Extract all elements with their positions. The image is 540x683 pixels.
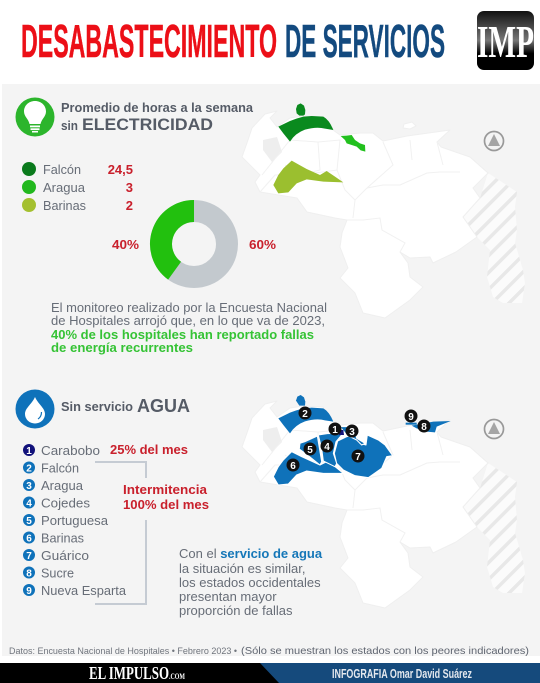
list: states with water failures: Sucre <box>41 566 74 580</box>
source note: (Sólo se muestran los estados con los peores indicadores) <box>241 645 529 657</box>
legend: electricity hours: 2 <box>126 198 133 213</box>
list: states with water failures: Falcón <box>41 460 79 476</box>
map number markers: 2 <box>302 409 308 420</box>
callout: intermitencia: Intermitencia <box>123 482 208 497</box>
map number markers: 7 <box>355 452 361 463</box>
text block: water summary: los estados occidentales <box>179 575 321 590</box>
heading: electricidad <box>61 101 254 134</box>
legend: electricity hours: Barinas <box>43 198 86 213</box>
map number markers: 1 <box>332 425 338 436</box>
heading: electricidad: sin <box>61 119 78 133</box>
source note: Datos: Encuesta Nacional de Hospitales • Febrero 2023 • <box>9 646 237 657</box>
icon: north marker <box>484 420 504 438</box>
map: electricity states <box>242 103 525 318</box>
map number markers: 6 <box>290 461 296 472</box>
list: states with water failures: 1 <box>26 446 32 457</box>
callout: 25% del mes: 25% del mes <box>110 442 188 457</box>
legend: electricity hours: 24,5 <box>108 162 133 177</box>
legend: electricity hours <box>22 162 133 213</box>
list: states with water failures: 7 <box>26 551 32 562</box>
footer bar: .COM <box>169 672 185 681</box>
list: states with water failures: Barinas <box>41 530 84 546</box>
list: states with water failures: 4 <box>26 498 32 510</box>
list: states with water failures: 5 <box>26 516 32 527</box>
list: states with water failures: Aragua <box>41 478 84 493</box>
list: states with water failures: Portuguesa <box>41 513 109 528</box>
map number markers: 3 <box>349 427 355 438</box>
footer bar <box>0 663 540 683</box>
list: states with water failures: 8 <box>26 568 32 580</box>
text block: water summary: la situación es similar, <box>179 561 305 576</box>
legend: electricity hours: Falcón <box>43 162 81 177</box>
donut chart <box>112 211 276 277</box>
donut chart: 60% <box>249 237 276 252</box>
list: states with water failures: 2 <box>26 464 32 474</box>
list: states with water failures: Carabobo <box>41 443 100 458</box>
list: states with water failures: Nueva Esparta <box>41 583 127 598</box>
bracket <box>95 462 146 604</box>
donut chart: 40% <box>112 237 139 252</box>
title: DESABASTECIMIENTO <box>21 15 277 67</box>
legend: electricity hours: Aragua <box>43 180 86 195</box>
map number markers <box>286 406 430 472</box>
map: water states <box>242 395 525 608</box>
text block: electricity summary: de Hospitales arrojó que, en lo que va de 2023, <box>51 313 325 328</box>
list: states with water failures: Cojedes <box>41 496 91 510</box>
icon: water drop <box>16 390 54 428</box>
list: states with water failures: Guárico <box>41 548 89 563</box>
text block: water summary: presentan mayor <box>179 589 277 604</box>
list: states with water failures: 6 <box>26 534 32 544</box>
map number markers: 5 <box>307 445 313 456</box>
footer bar: INFOGRAFIA Omar David Suárez <box>332 666 472 681</box>
heading: electricidad: Promedio de horas a la semana <box>61 101 254 115</box>
legend: electricity hours: 3 <box>126 180 133 195</box>
text block: electricity summary <box>51 300 327 355</box>
map number markers: 8 <box>421 422 427 433</box>
text block: electricity summary: El monitoreo realizado por la Encuesta Nacional <box>51 300 327 315</box>
list: states with water failures <box>23 443 127 598</box>
icon: light bulb <box>16 98 54 136</box>
map number markers: 9 <box>408 412 414 423</box>
icon: north marker <box>484 132 504 150</box>
source note <box>9 645 529 657</box>
callout: intermitencia: 100% del mes <box>123 497 209 512</box>
map number markers: 4 <box>324 442 330 453</box>
heading: agua: Sin servicio <box>61 400 133 414</box>
text block: electricity summary: de energía recurrentes <box>51 340 193 355</box>
heading: agua: AGUA <box>137 396 190 416</box>
panel: electricidad <box>16 98 525 355</box>
heading: electricidad: ELECTRICIDAD <box>82 115 213 134</box>
footer bar: EL IMPULSO <box>89 663 169 683</box>
list: states with water failures: 3 <box>26 481 32 492</box>
text block: water summary: proporción de fallas <box>179 603 293 618</box>
heading: agua <box>61 396 190 416</box>
panel: agua <box>16 390 525 618</box>
text block: water summary: Con el servicio de agua <box>179 546 323 561</box>
callout: intermitencia <box>123 482 209 512</box>
list: states with water failures: 9 <box>26 586 32 597</box>
text block: electricity summary: 40% de los hospitales han reportado fallas <box>51 327 314 342</box>
text block: water summary <box>179 546 323 618</box>
